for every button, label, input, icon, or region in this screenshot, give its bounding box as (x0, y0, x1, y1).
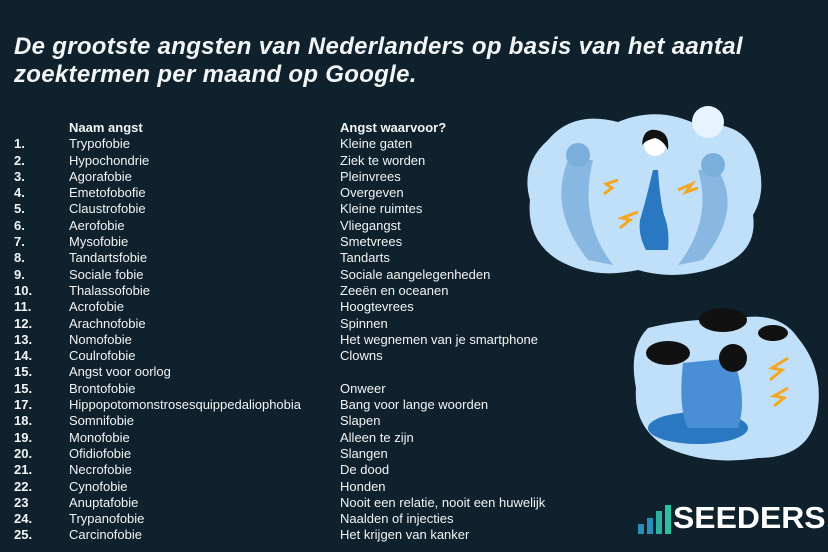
text: Somnifobie (69, 413, 134, 428)
text: 6. (14, 218, 25, 233)
text: 10. (14, 283, 32, 298)
text: Overgeven (340, 185, 404, 200)
text: Angst waarvoor? (340, 120, 446, 135)
text: 4. (14, 185, 25, 200)
title: De grootste angsten van Nederlanders op basis van het aantal (14, 33, 743, 60)
text: Arachnofobie (69, 316, 146, 331)
text: Slangen (340, 446, 388, 461)
text: Honden (340, 479, 386, 494)
illustration: sad woman under clouds (634, 308, 819, 460)
text: Cynofobie (69, 479, 128, 494)
title: zoektermen per maand op Google. (14, 61, 417, 88)
text: Hypochondrie (69, 153, 149, 168)
text: Tandartsfobie (69, 250, 147, 265)
text: Monofobie (69, 430, 130, 445)
text: Het krijgen van kanker (340, 527, 469, 542)
text: 8. (14, 250, 25, 265)
logo: SEEDERS: SEEDERS (673, 500, 826, 535)
text: Anuptafobie (69, 495, 138, 510)
text: 11. (14, 299, 31, 314)
text: 7. (14, 234, 25, 249)
text: Emetofobofie (69, 185, 146, 200)
text: 25. (14, 527, 32, 542)
text: Smetvrees (340, 234, 402, 249)
text: 5. (14, 201, 25, 216)
text: 21. (14, 462, 32, 477)
text: Slapen (340, 413, 380, 428)
text: Coulrofobie (69, 348, 136, 363)
illustration: anxious woman (527, 106, 762, 275)
text: De dood (340, 462, 389, 477)
text: Onweer (340, 381, 386, 396)
text: 23 (14, 495, 28, 510)
text: Necrofobie (69, 462, 132, 477)
text: Hoogtevrees (340, 299, 414, 314)
text: Acrofobie (69, 299, 124, 314)
text: 13. (14, 332, 32, 347)
text: Zeeën en oceanen (340, 283, 448, 298)
text: Alleen te zijn (340, 430, 414, 445)
title (14, 33, 743, 88)
text: 9. (14, 267, 25, 282)
text: Kleine gaten (340, 136, 412, 151)
text: Bang voor lange woorden (340, 397, 488, 412)
text: 12. (14, 316, 32, 331)
text: 15. (14, 364, 32, 379)
text: Mysofobie (69, 234, 128, 249)
text: Angst voor oorlog (69, 364, 171, 379)
text: Claustrofobie (69, 201, 146, 216)
text: Pleinvrees (340, 169, 401, 184)
text: 2. (14, 153, 25, 168)
text: Kleine ruimtes (340, 201, 422, 216)
text: Brontofobie (69, 381, 136, 396)
text: Thalassofobie (69, 283, 150, 298)
text: 17. (14, 397, 32, 412)
text: 24. (14, 511, 32, 526)
text: Tandarts (340, 250, 390, 265)
text: Vliegangst (340, 218, 401, 233)
text: Hippopotomonstrosesquippedaliophobia (69, 397, 301, 412)
text: Nomofobie (69, 332, 132, 347)
text: Carcinofobie (69, 527, 142, 542)
text: 19. (14, 430, 32, 445)
text: Aerofobie (69, 218, 125, 233)
text: 1. (14, 136, 25, 151)
text: Naalden of injecties (340, 511, 453, 526)
text: 18. (14, 413, 32, 428)
text: Sociale aangelegenheden (340, 267, 490, 282)
text: Agorafobie (69, 169, 132, 184)
text: Nooit een relatie, nooit een huwelijk (340, 495, 545, 510)
text: 14. (14, 348, 32, 363)
text: Trypofobie (69, 136, 130, 151)
text: Clowns (340, 348, 383, 363)
text: Naam angst (69, 120, 143, 135)
text: 15. (14, 381, 32, 396)
text: 22. (14, 479, 32, 494)
text: Sociale fobie (69, 267, 143, 282)
text: 20. (14, 446, 32, 461)
table: fears (14, 120, 546, 542)
text: Ofidiofobie (69, 446, 131, 461)
text: Trypanofobie (69, 511, 144, 526)
text: Spinnen (340, 316, 388, 331)
text: 3. (14, 169, 25, 184)
text: Het wegnemen van je smartphone (340, 332, 538, 347)
text: Ziek te worden (340, 153, 425, 168)
